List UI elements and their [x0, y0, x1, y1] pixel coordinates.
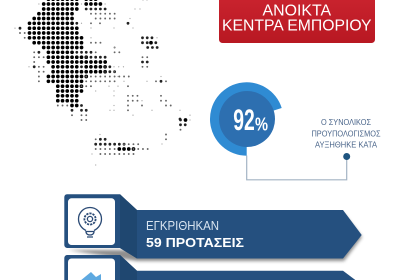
connector line	[247, 153, 350, 180]
icon: light blue shape	[80, 272, 101, 280]
ribbon: 59 proposals approved: 59 ΠΡΟΤΑΣΕΙΣ	[146, 235, 244, 250]
halftone map of Greece	[15, 0, 190, 165]
donut chart: 92%: %	[255, 114, 268, 134]
caption: budget increase	[312, 117, 380, 150]
donut chart: 92%: 92	[233, 104, 255, 137]
banner: ΑΝΟΙΚΤΑ ΚΕΝΤΡΑ ΕΜΠΟΡΙΟΥ: ΑΝΟΙΚΤΑ	[263, 2, 332, 19]
banner: ΑΝΟΙΚΤΑ ΚΕΝΤΡΑ ΕΜΠΟΡΙΟΥ: ΚΕΝΤΡΑ ΕΜΠΟΡΙΟΥ	[222, 17, 372, 34]
banner: ΑΝΟΙΚΤΑ ΚΕΝΤΡΑ ΕΜΠΟΡΙΟΥ	[219, 0, 375, 43]
caption: budget increase: ΠΡΟΥΠΟΛΟΓΙΣΜΟΣ	[312, 128, 380, 138]
caption: budget increase: ΑΥΞΗΘΗΚΕ ΚΑΤΑ	[315, 140, 377, 150]
ribbon: second item, cropped	[64, 255, 362, 280]
donut chart: 92%	[210, 82, 282, 156]
label text: ΕΓΚΡΙΘΗΚΑΝ	[146, 218, 219, 233]
icon: light bulb with gear	[68, 198, 115, 245]
ribbon: 59 proposals approved	[64, 194, 362, 261]
caption: budget increase: Ο ΣΥΝΟΛΙΚΟΣ	[321, 117, 371, 127]
